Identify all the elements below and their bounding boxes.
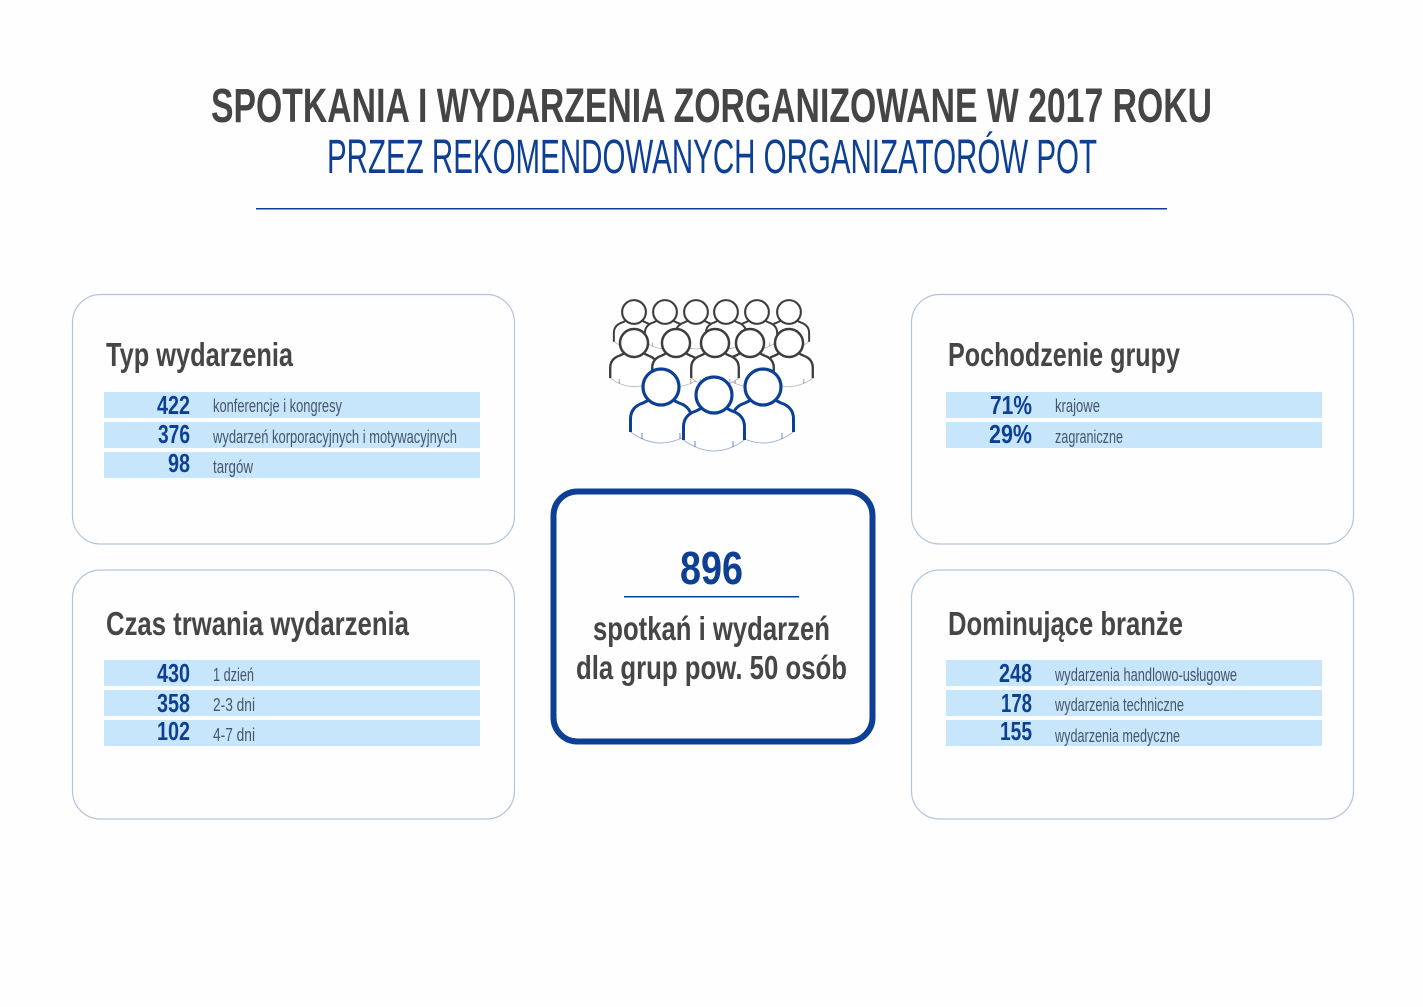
number: 896: 896	[680, 542, 743, 594]
panel: typ wydarzenia	[72, 294, 514, 544]
heading: czas trwania: Czas trwania wydarzenia	[106, 605, 409, 642]
row: 1 dzień	[104, 658, 480, 688]
row: 2-3 dni	[104, 688, 480, 718]
caption: spotkań i wydarzeń	[593, 610, 830, 647]
row: techniczne: 178	[1001, 688, 1032, 718]
row: handlowo-usługowe: wydarzenia handlowo-usługowe	[1054, 665, 1237, 685]
caption	[576, 610, 847, 686]
row: konferencje: 422	[157, 390, 190, 420]
icon: crowd of people	[610, 300, 813, 451]
row: krajowe: krajowe	[1055, 396, 1100, 416]
row: 2-3 dni: 358	[157, 688, 190, 718]
row: 4-7 dni	[104, 716, 480, 746]
panel: dominujące branże	[912, 570, 1354, 819]
row: zagraniczne	[946, 419, 1322, 449]
row: krajowe	[946, 390, 1322, 420]
row: konferencje	[104, 390, 480, 420]
row: konferencje: konferencje i kongresy	[213, 396, 342, 416]
row: 2-3 dni: 2-3 dni	[213, 695, 255, 715]
row: techniczne: wydarzenia techniczne	[1054, 695, 1184, 715]
heading: typ wydarzenia: Typ wydarzenia	[106, 336, 293, 373]
panel: czas trwania	[72, 570, 514, 819]
row: krajowe: 71%	[990, 390, 1032, 420]
row: targi: targów	[213, 457, 254, 477]
row: techniczne	[946, 688, 1322, 718]
row: handlowo-usługowe	[946, 658, 1322, 688]
row: 4-7 dni: 4-7 dni	[213, 725, 255, 745]
row: korporacyjne: wydarzeń korporacyjnych i motywacyjnych	[212, 427, 457, 447]
row: korporacyjne: 376	[158, 419, 190, 449]
row: medyczne	[946, 716, 1322, 746]
row: korporacyjne	[104, 419, 480, 449]
title	[211, 80, 1212, 184]
row: zagraniczne: zagraniczne	[1055, 427, 1123, 447]
row: 1 dzień: 430	[157, 658, 190, 688]
row: zagraniczne: 29%	[989, 419, 1032, 449]
caption: dla grup pow. 50 osób	[576, 649, 847, 686]
row: targi: 98	[168, 448, 190, 478]
row: 1 dzień: 1 dzień	[213, 665, 254, 685]
row: medyczne: 155	[1000, 716, 1032, 746]
row: 4-7 dni: 102	[157, 716, 190, 746]
row: medyczne: wydarzenia medyczne	[1054, 726, 1180, 746]
row: handlowo-usługowe: 248	[999, 658, 1032, 688]
panel: total 896	[554, 492, 872, 742]
panel: pochodzenie grupy	[912, 294, 1354, 544]
heading: pochodzenie grupy: Pochodzenie grupy	[948, 336, 1180, 373]
heading: dominujące branże: Dominujące branże	[948, 605, 1183, 642]
row: targi	[104, 448, 480, 478]
